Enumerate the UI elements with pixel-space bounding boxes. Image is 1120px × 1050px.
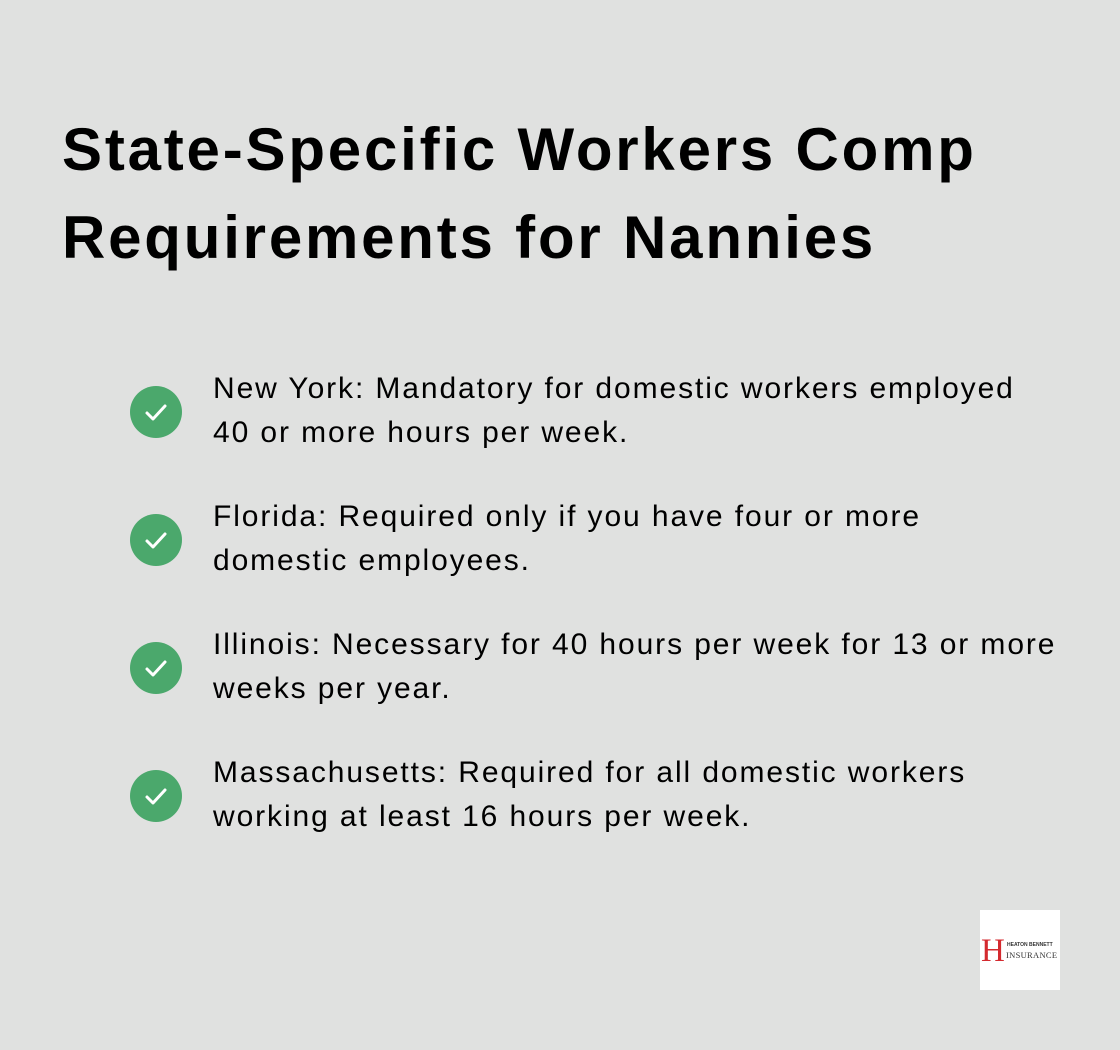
text: 40 or more hours per week. bbox=[213, 416, 629, 449]
logo: INSURANCE bbox=[1006, 950, 1057, 960]
icon: check bbox=[130, 770, 182, 822]
title: Requirements for Nannies bbox=[62, 204, 876, 271]
text bbox=[213, 372, 1015, 449]
text bbox=[213, 628, 1056, 705]
text: Illinois: Necessary for 40 hours per week for 13 or more bbox=[213, 628, 1056, 661]
item: Illinois bbox=[130, 628, 1056, 705]
text bbox=[213, 756, 966, 833]
text: Florida: Required only if you have four or more bbox=[213, 500, 921, 533]
text: working at least 16 hours per week. bbox=[213, 800, 751, 833]
text: Massachusetts: Required for all domestic workers bbox=[213, 756, 966, 789]
icon: check bbox=[130, 514, 182, 566]
title bbox=[62, 116, 977, 271]
text bbox=[213, 500, 921, 577]
icon: check bbox=[130, 386, 182, 438]
item: New York bbox=[130, 372, 1015, 449]
logo bbox=[980, 910, 1060, 990]
item: Massachusetts bbox=[130, 756, 966, 833]
title: State-Specific Workers Comp bbox=[62, 116, 977, 183]
item: Florida bbox=[130, 500, 921, 577]
logo: HEATON BENNETT bbox=[1007, 942, 1053, 948]
logo: H bbox=[981, 933, 1005, 969]
text: weeks per year. bbox=[213, 672, 452, 705]
icon: check bbox=[130, 642, 182, 694]
text: New York: Mandatory for domestic workers employed bbox=[213, 372, 1015, 405]
text: domestic employees. bbox=[213, 544, 531, 577]
